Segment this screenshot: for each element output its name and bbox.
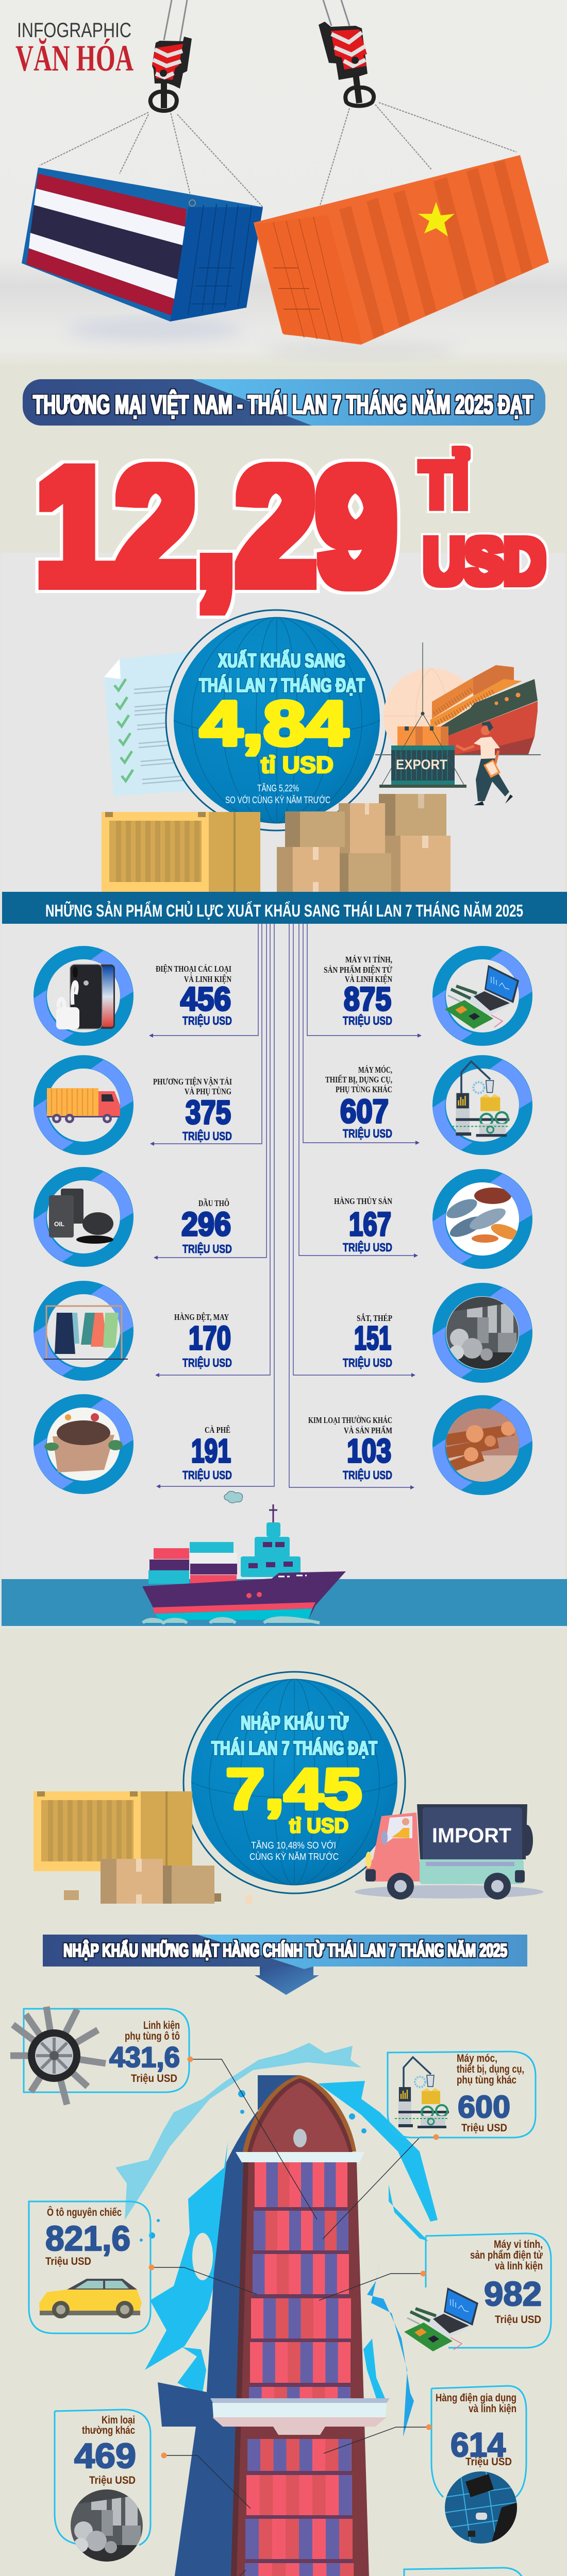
callout: machinery: Triệu USD — [461, 2122, 507, 2134]
callout: household electronics: và linh kiện — [469, 2403, 516, 2415]
product: computers: 875 — [344, 980, 391, 1018]
globe: export value: SO VỚI CÙNG KỲ NĂM TRƯỚC — [225, 794, 330, 805]
product: machinery — [325, 1060, 532, 1150]
callout: household electronics: 614 — [451, 2426, 506, 2464]
product: steel: 151 — [354, 1319, 391, 1357]
connector arrows: export products — [149, 924, 422, 1489]
product: computers: TRIỆU USD — [343, 1013, 392, 1027]
product: phones: 456 — [180, 980, 231, 1018]
ship hull — [230, 2162, 370, 2576]
product: computers: SẢN PHẨM ĐIỆN TỬ — [324, 965, 392, 975]
logo: infographic van hoa — [15, 19, 134, 79]
product: crude oil: DẦU THÔ — [198, 1198, 229, 1208]
icon: yellow car — [39, 2279, 142, 2318]
heading bar: total trade — [23, 379, 545, 426]
callout: auto parts: phụ tùng ô tô — [125, 2030, 180, 2042]
product: textiles: TRIỆU USD — [182, 1355, 232, 1369]
product: vehicles: TRIỆU USD — [182, 1129, 232, 1143]
product: seafood: HÀNG THỦY SẢN — [334, 1196, 393, 1206]
callout: computers: và linh kiện — [495, 2260, 543, 2272]
checklist paper — [104, 652, 189, 796]
big number: 12,29: 12,29 — [36, 434, 396, 619]
callout: computers: 982 — [484, 2275, 542, 2313]
product: computers — [324, 951, 532, 1041]
water band — [2, 1579, 567, 1626]
product: crude oil: OIL — [54, 1221, 64, 1228]
hero: crane shadow on floor — [67, 318, 459, 359]
crane hook: left — [40, 0, 263, 207]
product: coffee: TRIỆU USD — [182, 1468, 232, 1482]
globe: import value: THÁI LAN 7 THÁNG ĐẠT — [211, 1737, 377, 1759]
globe: import value: 7,45 — [226, 1757, 362, 1821]
product: machinery: 607 — [340, 1093, 389, 1130]
import truck: IMPORT — [432, 1824, 511, 1847]
globe: import value: TĂNG 10,48% SO VỚI — [251, 1840, 336, 1851]
product: phones: TRIỆU USD — [182, 1013, 232, 1027]
unit: USD: USD — [423, 525, 545, 598]
icon: wheel and parts — [10, 2007, 106, 2105]
product: seafood: 167 — [349, 1206, 391, 1243]
leader lines with dots — [152, 2059, 436, 2576]
globe: export value — [166, 610, 387, 831]
callout: cars: Triệu USD — [45, 2256, 91, 2267]
globe: import value: tỉ USD — [289, 1815, 348, 1837]
callout: machinery: phụ tùng khác — [457, 2074, 516, 2086]
section bar: export products — [2, 892, 567, 924]
callout: chemicals — [398, 2568, 525, 2576]
product: crude oil — [34, 1172, 232, 1262]
banner: import products with arrow — [43, 1935, 527, 1995]
export scene: ship, crane, worker — [375, 642, 541, 805]
product: coffee — [34, 1399, 232, 1489]
ship shadow — [158, 2075, 300, 2576]
callout: household electronics — [426, 2386, 526, 2544]
logo: infographic van hoa: INFOGRAPHIC — [17, 19, 131, 42]
container: Vietnam flag — [254, 155, 549, 345]
globe: import value: NHẬP KHẨU TỪ — [241, 1711, 348, 1734]
callout: cars: 821,6 — [45, 2219, 130, 2258]
product: other metals: 103 — [347, 1432, 391, 1469]
callout: other metals: thường khác — [82, 2425, 135, 2436]
container: Thai flag — [22, 167, 263, 321]
callout: computers: Máy vi tính, — [494, 2239, 543, 2250]
product: steel — [343, 1287, 532, 1378]
product: steel: SẮT, THÉP — [357, 1313, 392, 1323]
product: phones: VÀ LINH KIỆN — [184, 974, 232, 984]
product: machinery: PHỤ TÙNG KHÁC — [336, 1084, 392, 1094]
stacked cardboard boxes — [277, 794, 451, 892]
yellow shipping container (export) — [102, 812, 260, 892]
product: other metals: KIM LOẠI THƯỜNG KHÁC — [308, 1415, 392, 1425]
product: vehicles: VÀ PHỤ TÙNG — [185, 1087, 231, 1096]
globe: import value — [184, 1672, 405, 1893]
cardboard boxes (import) — [64, 1859, 252, 1904]
globe: export value: 4,84 — [200, 688, 348, 758]
product: computers: MÁY VI TÍNH, — [345, 955, 392, 964]
bridge deck — [210, 2398, 390, 2403]
callout: auto parts — [10, 2007, 193, 2105]
globe: export value: TĂNG 5,22% — [257, 783, 299, 793]
illustrated cargo ship — [142, 1491, 346, 1623]
product: textiles: HÀNG DỆT, MAY — [174, 1312, 229, 1322]
callout: other metals — [55, 2410, 167, 2562]
product: crude oil: 296 — [181, 1206, 231, 1243]
image: circuit board — [445, 2471, 517, 2544]
callout: household electronics: Triệu USD — [465, 2456, 512, 2468]
product: phones — [34, 951, 232, 1041]
product: steel: TRIỆU USD — [343, 1355, 392, 1369]
callout: machinery: Máy móc, — [457, 2053, 497, 2064]
callout: auto parts: 431,6 — [109, 2041, 180, 2073]
crane hook: right — [319, 0, 516, 209]
callout: computers — [404, 2233, 551, 2351]
callout: auto parts: Linh kiện — [143, 2020, 180, 2031]
callout: other metals: Kim loại — [102, 2414, 135, 2426]
top-down cargo ship — [158, 2075, 390, 2576]
callout: household electronics: Hàng điện gia dụng — [436, 2392, 516, 2404]
product: machinery: THIẾT BỊ, DỤNG CỤ, — [325, 1075, 392, 1084]
product: crude oil: TRIỆU USD — [182, 1242, 232, 1256]
callout: auto parts: Triệu USD — [131, 2073, 177, 2084]
globe: import value: CÙNG KỲ NĂM TRƯỚC — [249, 1851, 339, 1862]
page background — [0, 0, 567, 1629]
product: computers: VÀ LINH KIỆN — [345, 974, 393, 984]
product: seafood — [334, 1174, 532, 1264]
callout: computers: sản phẩm điện tử — [470, 2249, 543, 2261]
container rows — [245, 2162, 354, 2576]
product: coffee: 191 — [191, 1432, 231, 1469]
globe: export value: XUẤT KHẨU SANG — [218, 649, 345, 672]
import truck — [355, 1804, 543, 1900]
product: machinery: TRIỆU USD — [343, 1126, 392, 1140]
yellow shipping container (import) — [34, 1791, 192, 1871]
unit: ti: TỈ — [420, 449, 468, 521]
callout: machinery — [388, 2052, 536, 2140]
product: textiles — [34, 1285, 232, 1376]
callout: other metals: 469 — [74, 2436, 136, 2476]
product: phones: ĐIỆN THOẠI CÁC LOẠI — [156, 964, 231, 974]
product: vehicles: PHƯƠNG TIỆN VẬN TẢI — [153, 1077, 232, 1087]
bow — [243, 2075, 356, 2152]
product: vehicles: 375 — [186, 1094, 231, 1131]
globe: export value: tỉ USD — [261, 752, 333, 778]
callout: other metals: Triệu USD — [89, 2475, 136, 2486]
product: other metals: TRIỆU USD — [343, 1468, 392, 1482]
callout: computers: Triệu USD — [495, 2314, 541, 2326]
callout: cars — [29, 2201, 155, 2333]
export scene: ship, crane, worker: EXPORT — [396, 757, 447, 772]
logo: infographic van hoa: VĂN HÓA — [15, 38, 134, 79]
callout: machinery: thiết bị, dụng cụ, — [457, 2063, 524, 2075]
product: other metals: VÀ SẢN PHẨM — [344, 1426, 392, 1435]
product: machinery: MÁY MÓC, — [358, 1065, 392, 1075]
product: other metals — [308, 1400, 532, 1490]
product: coffee: CÀ PHÊ — [205, 1425, 230, 1435]
product: textiles: 170 — [189, 1319, 231, 1357]
water splash around top-down ship — [115, 2043, 438, 2576]
callout: machinery: 600 — [458, 2090, 510, 2124]
callout: cars: Ô tô nguyên chiếc — [47, 2206, 122, 2218]
product: vehicles — [34, 1060, 232, 1150]
product: seafood: TRIỆU USD — [343, 1240, 392, 1254]
globe: export value: THÁI LAN 7 THÁNG ĐẠT — [199, 674, 365, 697]
